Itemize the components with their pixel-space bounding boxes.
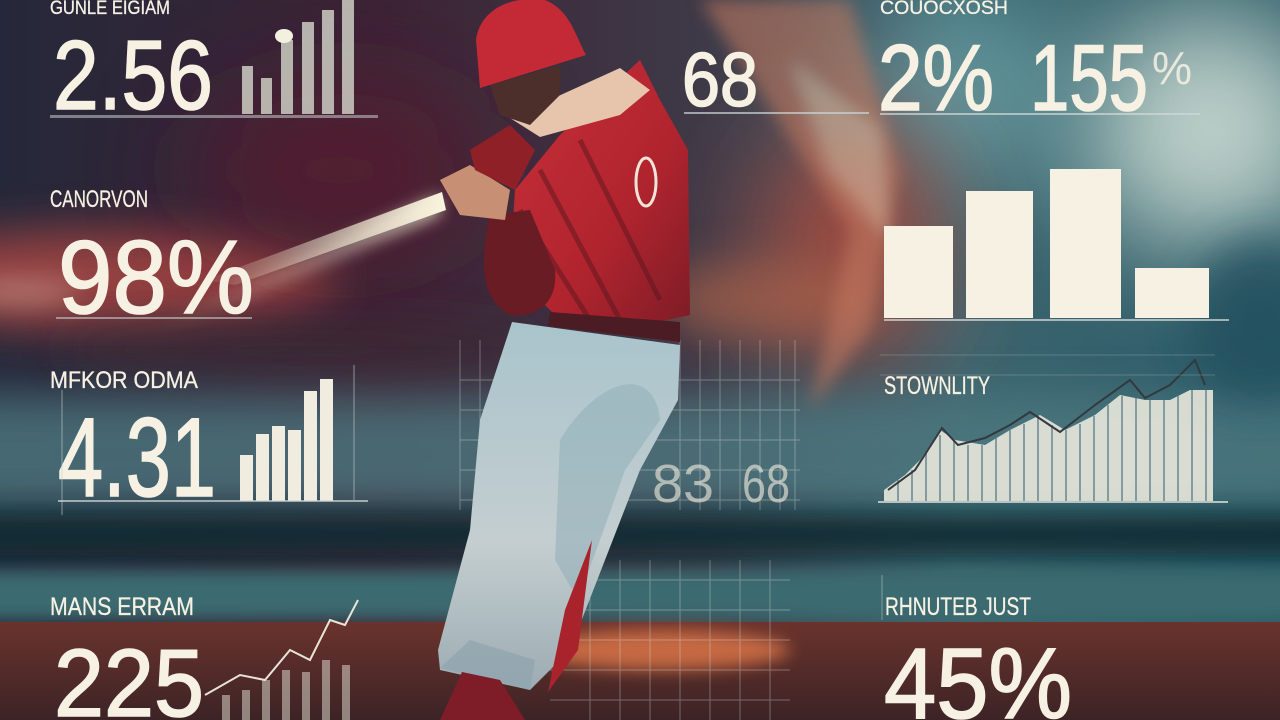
- area chart: stability: [878, 355, 1228, 503]
- shoe: [440, 672, 525, 720]
- stat: top right: %: [1152, 42, 1192, 94]
- light beam of bat swing: [140, 195, 440, 335]
- stat: 4.31 with bars: 4.31: [58, 395, 216, 520]
- stat: top left: 2.56: [53, 20, 213, 130]
- area chart: stability: STOWNLITY: [884, 372, 990, 400]
- jersey logo: [636, 158, 656, 206]
- forearm and hands: [440, 165, 510, 220]
- stat: top right: 2%: [878, 25, 994, 130]
- background grid behind legs: [460, 340, 800, 720]
- stat: 225 with chart: MANS ERRAM: [50, 593, 194, 621]
- faint center number: 83: [652, 454, 714, 514]
- stat: top right: [878, 0, 1200, 130]
- stat: 4.31 with bars: MFKOR ODMA: [50, 367, 198, 394]
- stat: 225 with chart: [50, 593, 358, 720]
- stat: caption 98%: 98%: [58, 220, 254, 336]
- stat: top left: [50, 0, 378, 130]
- stat: top centre: 68: [682, 38, 758, 123]
- faint center number: [652, 454, 790, 514]
- stat: 45%: [882, 575, 1072, 720]
- player: batter: [205, 0, 690, 720]
- stat: caption 98%: CANORVON: [50, 186, 148, 213]
- bar chart: right: [884, 169, 1229, 321]
- rear arm: [484, 210, 555, 315]
- helmet: [476, 0, 586, 88]
- bat: [205, 192, 446, 285]
- faint center number: 68: [742, 454, 790, 514]
- stat: 45%: RHNUTEB JUST: [885, 593, 1031, 621]
- face: [490, 65, 560, 125]
- jersey torso: [510, 60, 690, 330]
- stat: top right: 155: [1030, 25, 1148, 130]
- legs: [438, 322, 680, 690]
- motion streaks behind batter: [700, 0, 900, 410]
- stat: 4.31 with bars: [50, 365, 368, 520]
